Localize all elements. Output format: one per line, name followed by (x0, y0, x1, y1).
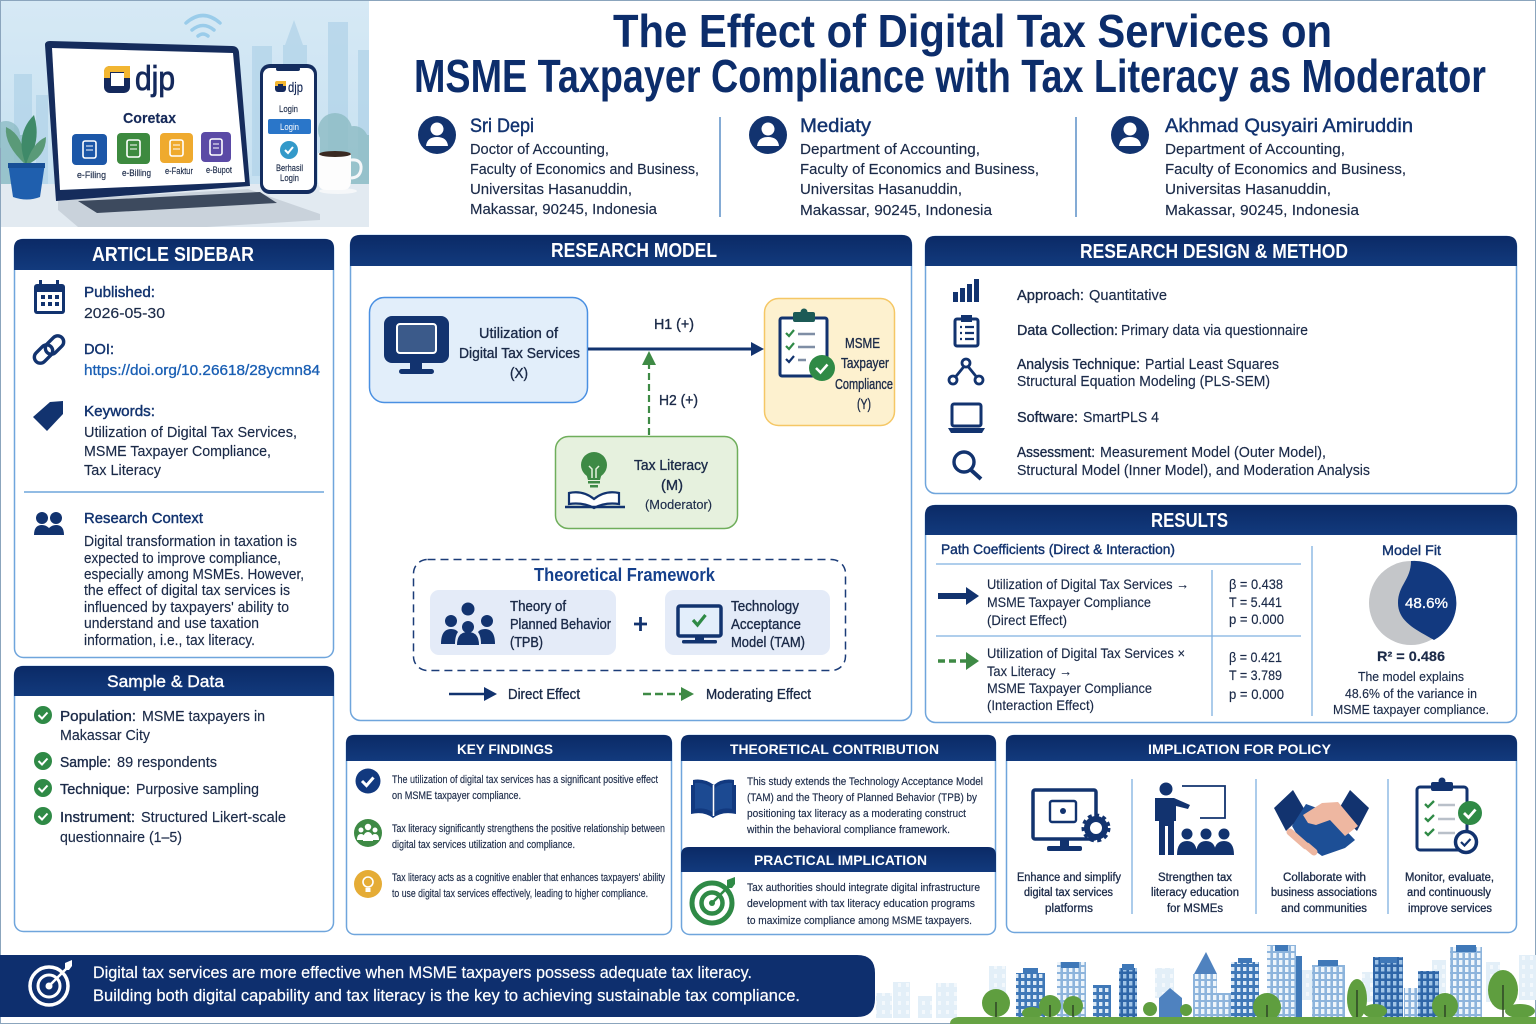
box: moderator M (556, 436, 738, 528)
phone: Berhasil (276, 163, 303, 173)
author: Sri Depi: Doctor of Accounting, (470, 142, 609, 158)
takeaway text: Digital tax services are more effective when MSME taxpayers possess adequate tax literacy. (93, 964, 752, 982)
theoretical contribution text: positioning tax literacy as a moderating construct (747, 808, 966, 820)
finding one: The utilization of digital tax services has a significant positive effect (392, 774, 658, 786)
direct effect text: Utilization of Digital Tax Services → (987, 576, 1189, 592)
policy item: monitor and evaluate: and continuously (1407, 887, 1491, 899)
sample details: Population: (60, 709, 136, 725)
icon: calendar (34, 280, 65, 314)
legend: moderating effect: Moderating Effect (706, 687, 811, 703)
legend: direct effect: Direct Effect (508, 687, 580, 703)
panel: sample and data (14, 666, 334, 932)
technology acceptance model (665, 590, 830, 655)
interaction effect text (987, 645, 1185, 713)
author: Akhmad Qusyairi Amiruddin: Department of Accounting, (1165, 142, 1345, 158)
author: Sri Depi: Makassar, 90245, Indonesia (470, 202, 658, 218)
policy item: tax literacy education: for MSMEs (1167, 903, 1223, 915)
icon: target with arrow (692, 877, 735, 923)
icon: lightbulb (354, 870, 382, 898)
practical implication header: PRACTICAL IMPLICATION (754, 852, 927, 868)
research context text: Research Context (84, 511, 203, 527)
rooftops (1023, 945, 1476, 974)
finding three: to use digital tax services effectively, leading to higher compliance. (392, 888, 648, 900)
method details: Assessment: (1017, 445, 1095, 461)
icon: handshake (1274, 790, 1369, 856)
method details: Software: (1017, 410, 1078, 426)
djp logo: djp (135, 60, 175, 98)
service labels: e-Filing (77, 170, 106, 180)
finding one (392, 774, 658, 802)
author: Sri Depi: Universitas Hasanuddin, (470, 182, 632, 198)
sample details: MSME taxpayers in (142, 709, 265, 725)
policy item: tax literacy education: literacy education (1151, 887, 1239, 899)
direct effect statistics: p = 0.000 (1229, 611, 1284, 627)
author: Sri Depi: Faculty of Economics and Business, (470, 162, 699, 178)
sample details: Sample: (60, 755, 111, 771)
theoretical framework: Theoretical Framework (534, 565, 716, 585)
policy item: enhance platforms: Enhance and simplify (1017, 872, 1121, 884)
phone (260, 64, 317, 194)
method details: Quantitative (1089, 288, 1167, 304)
desk (1, 184, 369, 227)
legend: moderating effect (643, 687, 811, 703)
theory of planned behavior: (TPB) (510, 635, 543, 651)
technology acceptance model: Technology (731, 599, 800, 615)
arrow: H1 direct effect (588, 342, 764, 356)
hero illustration: laptop and phone (0, 1, 369, 227)
icon: tag (33, 401, 63, 431)
research context text: Digital transformation in taxation is (84, 534, 297, 550)
policy item: collaborate: and communities (1281, 903, 1367, 915)
interaction effect text: Utilization of Digital Tax Services × (987, 645, 1185, 661)
title (414, 5, 1486, 102)
panel: research design and method: RESEARCH DESIGN & METHOD (1080, 241, 1348, 263)
direct effect text: MSME Taxpayer Compliance (987, 594, 1151, 610)
legend: direct effect (449, 687, 580, 703)
finding three (392, 872, 665, 900)
author: Mediaty (749, 116, 1039, 219)
policy item: enhance platforms: digital tax services (1024, 887, 1113, 899)
path coefficients heading: Path Coefficients (Direct & Interaction) (941, 541, 1175, 557)
method details (1017, 288, 1370, 479)
method details: Approach: (1017, 288, 1084, 304)
service labels (77, 165, 232, 180)
icon: clipboard with checks (1417, 778, 1482, 852)
takeaway text: Building both digital capability and tax literacy is the key to achieving sustainable tax compliance. (93, 987, 800, 1005)
theory of planned behavior: Theory of (510, 599, 567, 615)
theory of planned behavior (430, 590, 616, 655)
sample details: Technique: (60, 782, 130, 798)
icon: bulb and book (565, 452, 625, 508)
panel: article sidebar (14, 239, 334, 658)
policy item: enhance platforms (1017, 790, 1121, 915)
box: independent variable X (370, 298, 588, 402)
keywords (84, 404, 297, 479)
research context text: information, i.e., tax literacy. (84, 633, 255, 649)
H1 label: H1 (+) (654, 317, 694, 333)
background skyline (14, 20, 369, 185)
icon: open book (691, 780, 736, 818)
keywords: MSME Taxpayer Compliance, (84, 444, 271, 460)
panel: research model (350, 235, 912, 720)
author: Sri Depi: Sri Depi (470, 116, 534, 137)
icon: author avatar (418, 116, 456, 154)
model fit text: The model explains (1358, 669, 1464, 684)
author: Akhmad Qusyairi Amiruddin: Makassar, 90245, Indonesia (1165, 203, 1360, 219)
published date (84, 285, 165, 322)
theoretical contribution text: within the behavioral compliance framework. (746, 824, 950, 836)
box: dependent variable Y: Taxpayer (841, 356, 889, 372)
theoretical contribution text (746, 776, 983, 836)
keywords: Utilization of Digital Tax Services, (84, 425, 297, 441)
trees (982, 970, 1535, 1021)
theoretical framework (414, 560, 846, 670)
icon: network (949, 359, 983, 384)
author: Akhmad Qusyairi Amiruddin (1111, 116, 1413, 219)
wifi symbol (186, 16, 220, 36)
panel: implication for policy (1006, 735, 1517, 932)
panel: sample and data: Sample & Data (107, 672, 225, 691)
policy item: tax literacy education (1151, 782, 1239, 915)
author: Mediaty: Makassar, 90245, Indonesia (800, 203, 993, 219)
footer takeaway banner (0, 955, 875, 1017)
DOI: DOI: (84, 342, 114, 358)
model fit text: R² = 0.486 (1377, 648, 1445, 664)
sample details: Structured Likert-scale (141, 810, 286, 826)
panel: key findings: KEY FINDINGS (457, 741, 553, 757)
box: independent variable X: Digital Tax Services (459, 346, 580, 362)
service labels: e-Faktur (165, 166, 193, 176)
buildings (1016, 973, 1045, 1018)
model fit text: MSME taxpayer compliance. (1333, 702, 1489, 717)
model fit heading: Model Fit (1382, 542, 1441, 558)
phone: Login (280, 173, 299, 183)
direct effect statistics (1229, 576, 1284, 627)
icon: monitor with check (678, 606, 721, 644)
icon: check (356, 768, 380, 794)
finding one: on MSME taxpayer compliance. (392, 790, 521, 802)
DOI (84, 342, 320, 379)
box: dependent variable Y: MSME (845, 336, 880, 352)
ground (950, 1017, 1536, 1024)
icon: computer monitor (384, 316, 449, 374)
research context text: the effect of digital tax services is (84, 583, 290, 599)
interaction effect arrow (938, 652, 979, 670)
box: dependent variable Y: Compliance (835, 377, 893, 393)
theoretical contribution text: This study extends the Technology Acceptance Model (747, 776, 983, 788)
laptop base (58, 189, 320, 227)
method details: Partial Least Squares (1145, 357, 1279, 373)
interaction effect statistics: T = 3.789 (1229, 667, 1282, 683)
service labels: e-Bupot (206, 165, 232, 175)
panel: research design and method (925, 236, 1517, 494)
pie chart: R squared: 48.6% (1405, 596, 1448, 612)
research context text: understand and use taxation (84, 616, 259, 632)
direct effect arrow (938, 587, 979, 605)
phone: Login (280, 122, 299, 132)
policy item: collaborate: business associations (1271, 887, 1377, 899)
decorative city skyline (876, 945, 1536, 1024)
box: dependent variable Y: (Y) (857, 397, 871, 413)
direct effect statistics: β = 0.438 (1229, 576, 1283, 592)
Coretax label: Coretax (123, 110, 177, 127)
check icons (34, 706, 52, 825)
method details: Structural Model (Inner Model), and Moderation Analysis (1017, 463, 1370, 479)
panel: results (925, 505, 1517, 722)
policy item: tax literacy education: Strengthen tax (1158, 872, 1232, 884)
research context text: expected to improve compliance, (84, 551, 281, 567)
finding two: Tax literacy significantly strengthens the positive relationship between (392, 823, 665, 835)
panel: theoretical contribution and practical implication: THEORETICAL CONTRIBUTION (730, 741, 939, 757)
background foliage (0, 113, 369, 185)
sample details: questionnaire (1–5) (60, 830, 182, 846)
practical implication text: to maximize compliance among MSME taxpayers. (747, 915, 972, 927)
title: The Effect of Digital Tax Services on (613, 5, 1332, 57)
box: independent variable X: (X) (510, 366, 528, 382)
policy item: monitor and evaluate: Monitor, evaluate, (1405, 872, 1494, 884)
panel: article sidebar: ARTICLE SIDEBAR (92, 244, 254, 266)
direct effect statistics: T = 5.441 (1229, 594, 1282, 610)
method details: Primary data via questionnaire (1121, 323, 1308, 339)
icon: people (354, 819, 382, 847)
author: Mediaty: Department of Accounting, (800, 142, 980, 158)
model fit text (1333, 648, 1489, 717)
published date: Published: (84, 285, 155, 301)
author: Mediaty: Faculty of Economics and Business, (800, 162, 1039, 178)
author: Akhmad Qusyairi Amiruddin: Akhmad Qusyairi Amiruddin (1165, 116, 1413, 137)
policy item: enhance platforms: platforms (1045, 903, 1093, 915)
takeaway text (93, 964, 800, 1005)
direct effect text: (Direct Effect) (987, 612, 1067, 628)
laptop screen (45, 41, 250, 201)
icon: bar chart (953, 279, 979, 302)
phone: Login (279, 104, 298, 114)
plant and pot (6, 115, 46, 200)
practical implication text (747, 882, 980, 927)
pie chart: R squared (1369, 561, 1456, 645)
box: moderator M: Tax Literacy (634, 458, 709, 474)
arrow: H2 moderating effect (642, 351, 656, 435)
icon: link (32, 333, 66, 366)
coffee cup (318, 151, 361, 194)
panel: results: RESULTS (1151, 510, 1228, 532)
practical implication text: Tax authorities should integrate digital infrastructure (747, 882, 980, 894)
research context text: especially among MSMEs. However, (84, 567, 304, 583)
policy item: monitor and evaluate (1405, 778, 1494, 915)
panel: implication for policy: IMPLICATION FOR POLICY (1148, 741, 1332, 757)
sample details: Purposive sampling (136, 782, 259, 798)
finding two: digital tax services utilization and compliance. (392, 839, 575, 851)
author: Mediaty: Universitas Hasanuddin, (800, 182, 962, 198)
icon: author avatar (749, 116, 787, 154)
method details: Data Collection: (1017, 323, 1118, 339)
theoretical contribution text: (TAM) and the Theory of Planned Behavior (TPB) by (747, 792, 977, 804)
interaction effect text: (Interaction Effect) (987, 697, 1094, 713)
author: Akhmad Qusyairi Amiruddin: Universitas Hasanuddin, (1165, 182, 1331, 198)
icon: laptop (948, 404, 985, 433)
panel: key findings (346, 735, 672, 934)
sample details: 89 respondents (117, 755, 217, 771)
policy item: collaborate (1271, 790, 1377, 915)
finding three: Tax literacy acts as a cognitive enabler that enhances taxpayers' ability (392, 872, 665, 884)
technology acceptance model: Model (TAM) (731, 635, 805, 651)
panel: research model: RESEARCH MODEL (551, 240, 717, 262)
practical implication text: development with tax literacy education programs (747, 898, 975, 910)
icon: target (30, 960, 72, 1005)
djp logo (104, 60, 175, 98)
icon: author avatar (1111, 116, 1149, 154)
interaction effect statistics: β = 0.421 (1229, 649, 1282, 665)
sample details (60, 709, 286, 846)
published date: 2026-05-30 (84, 306, 165, 322)
box: moderator M: (M) (661, 478, 683, 494)
interaction effect statistics (1229, 649, 1284, 702)
box: moderator M: (Moderator) (645, 497, 712, 512)
DOI: https://doi.org/10.26618/28ycmn84 (84, 363, 320, 379)
icon: magnifier (954, 452, 981, 479)
H2 label: H2 (+) (659, 393, 698, 409)
direct effect text (987, 576, 1189, 628)
finding two (392, 823, 665, 851)
policy item: monitor and evaluate: improve services (1408, 903, 1492, 915)
practical implication header (681, 847, 996, 872)
icon: people group (441, 602, 495, 645)
method details: Structural Equation Modeling (PLS-SEM) (1017, 374, 1270, 390)
research context text: influenced by taxpayers' ability to (84, 600, 289, 616)
box: dependent variable Y (764, 298, 894, 426)
phone: djp (288, 79, 303, 95)
keywords: Tax Literacy (84, 463, 162, 479)
policy item: collaborate: Collaborate with (1283, 872, 1366, 884)
box: independent variable X: Utilization of (479, 326, 559, 342)
sample details: Makassar City (60, 728, 151, 744)
service icons (72, 132, 231, 165)
panel: theoretical contribution and practical implication (681, 735, 996, 934)
technology acceptance model: Acceptance (731, 617, 801, 633)
icon: clipboard (955, 315, 978, 346)
sample details: Instrument: (60, 810, 135, 826)
service labels: e-Billing (122, 168, 151, 178)
model fit text: 48.6% of the variance in (1345, 686, 1477, 701)
method details: Measurement Model (Outer Model), (1100, 445, 1326, 461)
distant buildings (876, 955, 1536, 1018)
icon: compliance clipboard (780, 308, 835, 381)
icon: teacher and audience (1155, 782, 1234, 855)
author: Akhmad Qusyairi Amiruddin: Faculty of Economics and Business, (1165, 162, 1406, 178)
method details: Analysis Technique: (1017, 357, 1140, 373)
plus sign (634, 617, 647, 631)
icon: research context people (34, 512, 64, 535)
author: Sri Depi (418, 116, 699, 218)
interaction effect text: Tax Literacy → (987, 663, 1072, 679)
interaction effect text: MSME Taxpayer Compliance (987, 680, 1152, 696)
keywords: Keywords: (84, 404, 155, 420)
theory of planned behavior: Planned Behavior (510, 617, 611, 633)
author: Mediaty: Mediaty (800, 116, 872, 137)
research context text (84, 511, 304, 649)
method details: SmartPLS 4 (1083, 410, 1159, 426)
icon: monitor with gear (1033, 790, 1109, 851)
interaction effect statistics: p = 0.000 (1229, 686, 1284, 702)
